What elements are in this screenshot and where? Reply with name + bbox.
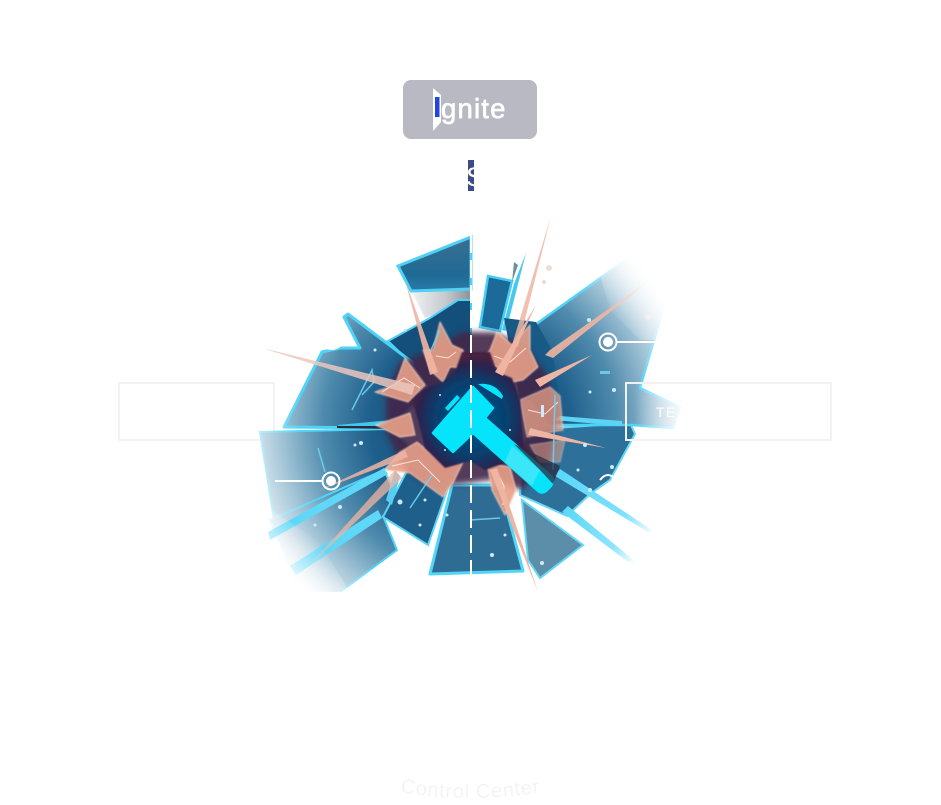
shard: bottom: [430, 485, 523, 574]
marker: lower left: [275, 472, 340, 490]
logo mark: [433, 88, 441, 131]
marker: lower right partial: [600, 475, 616, 480]
pink light rays: [262, 216, 650, 592]
marker: upper left partial: [323, 346, 340, 349]
marker: upper right: [600, 334, 655, 350]
curved caption: Control Center: [402, 780, 538, 798]
shard: lower left: [270, 470, 400, 592]
shard: ring right top: [504, 318, 560, 400]
crack lines: [382, 348, 558, 505]
clipped label text: TE: [656, 404, 677, 420]
shard: top left with grey band: [398, 237, 471, 318]
sparks: [314, 265, 651, 565]
icon: hammer: [433, 384, 553, 492]
shard: upper ring: [388, 300, 471, 390]
left empty label box: [119, 383, 274, 440]
blue cracks: [318, 330, 555, 520]
shard: left: [260, 429, 412, 520]
right tip fade: [638, 384, 682, 430]
dark impact ring: [386, 332, 558, 490]
shard: right lower: [520, 423, 635, 516]
shard: upper left: [284, 314, 420, 428]
clipped title letter: S: [466, 162, 484, 192]
shattered glass illustration: [240, 216, 700, 592]
orange crack patches: [375, 322, 565, 515]
logo wordmark: gnite: [441, 93, 507, 124]
top-right fade: [600, 255, 666, 340]
glass over hammer handle: [505, 444, 560, 486]
shard: small top: [480, 253, 526, 331]
right label box: [626, 383, 831, 440]
logo badge: [403, 80, 537, 139]
shard: lower centre left: [383, 465, 450, 545]
dark crater: [412, 352, 530, 470]
shard: right upper: [536, 261, 681, 430]
centre dashed line: [470, 235, 472, 582]
bottom-left fade: [268, 510, 348, 592]
cyan streaks: [268, 416, 655, 575]
shard: bottom right: [522, 500, 583, 578]
